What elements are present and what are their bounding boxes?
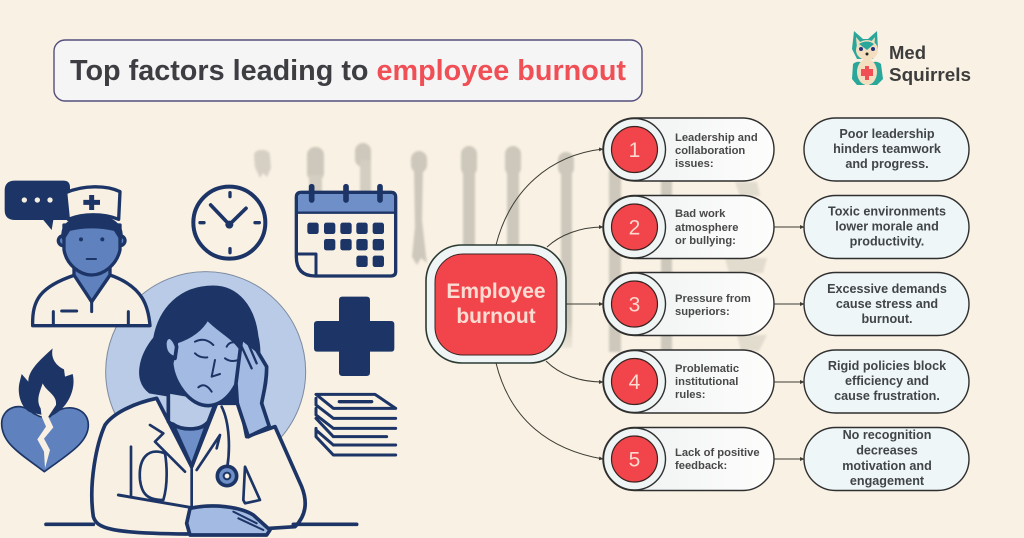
effect 2: lower morale and <box>835 220 939 234</box>
effect 1 <box>804 118 969 181</box>
factor 3: superiors: <box>675 306 730 318</box>
effect 4 <box>804 350 969 413</box>
factor 1: 1 <box>629 139 640 162</box>
factor 2: or bullying: <box>675 235 736 247</box>
effect 3: Excessive demands <box>827 282 947 296</box>
factor 1: Leadership and <box>675 132 758 144</box>
icon: burning broken heart <box>2 348 88 472</box>
effect 1: hinders teamwork <box>833 142 942 156</box>
effect 3: burnout. <box>861 312 913 326</box>
effect 4: efficiency and <box>845 374 929 388</box>
icon: halo circle <box>106 272 306 472</box>
factor 1: collaboration <box>675 145 745 157</box>
effect 2 <box>804 196 969 258</box>
effect 3: cause stress and <box>836 297 938 311</box>
panel: title <box>54 40 642 101</box>
factor 4: 4 <box>629 371 641 394</box>
connector arrows <box>496 149 804 459</box>
factor 1 <box>603 118 774 181</box>
effect 5: decreases <box>856 444 918 458</box>
factor 3: 3 <box>629 294 640 316</box>
logo text: Med <box>889 42 926 63</box>
factor 2: atmosphere <box>675 222 738 234</box>
effect 2: Toxic environments <box>828 204 946 218</box>
icon: nurse <box>33 187 150 326</box>
factor 2 <box>603 196 774 258</box>
factor 4: institutional <box>675 376 738 388</box>
factor 3 <box>603 272 774 336</box>
title text: Top factors leading to employee burnout <box>70 55 626 87</box>
logo: Med Squirrels <box>852 31 971 85</box>
desk line <box>46 519 357 530</box>
effect 1: Poor leadership <box>839 127 935 141</box>
icon: clock <box>193 187 265 259</box>
factor 1: issues: <box>675 158 714 170</box>
central node: Employee burnout: burnout <box>456 305 536 328</box>
central node: Employee burnout <box>426 245 566 363</box>
factor 4: Problematic <box>675 363 739 375</box>
effect 4: Rigid policies block <box>828 359 947 373</box>
factor 5: feedback: <box>675 460 727 472</box>
effect 5: No recognition <box>843 428 931 442</box>
illustration: burnout doctor and icons <box>2 181 396 535</box>
effect 3 <box>804 272 969 336</box>
factor 4 <box>603 350 774 413</box>
icon: squirrel mascot <box>852 31 883 85</box>
factor 2: 2 <box>629 216 640 240</box>
figure: doctor <box>92 287 305 535</box>
factor 3: Pressure from <box>675 293 751 305</box>
icon: stack of papers <box>316 394 396 455</box>
effect 5: engagement <box>850 474 925 488</box>
central node: Employee burnout: Employee <box>446 280 546 303</box>
factor 5: Lack of positive <box>675 447 760 459</box>
background: burnt matchsticks <box>254 143 767 352</box>
effect 1: and progress. <box>845 157 929 171</box>
factor 2: Bad work <box>675 208 726 220</box>
effect 5: motivation and <box>842 459 932 473</box>
logo text: Squirrels <box>889 64 971 85</box>
icon: calendar <box>296 187 396 276</box>
factor 5: 5 <box>629 448 640 472</box>
effect 4: cause frustration. <box>834 389 940 403</box>
icon: medical cross <box>314 297 394 376</box>
icon: speech bubble <box>5 181 70 230</box>
effect 5 <box>804 428 969 490</box>
effect 2: productivity. <box>850 234 924 248</box>
factor 5 <box>603 428 774 490</box>
factor 4: rules: <box>675 389 705 401</box>
